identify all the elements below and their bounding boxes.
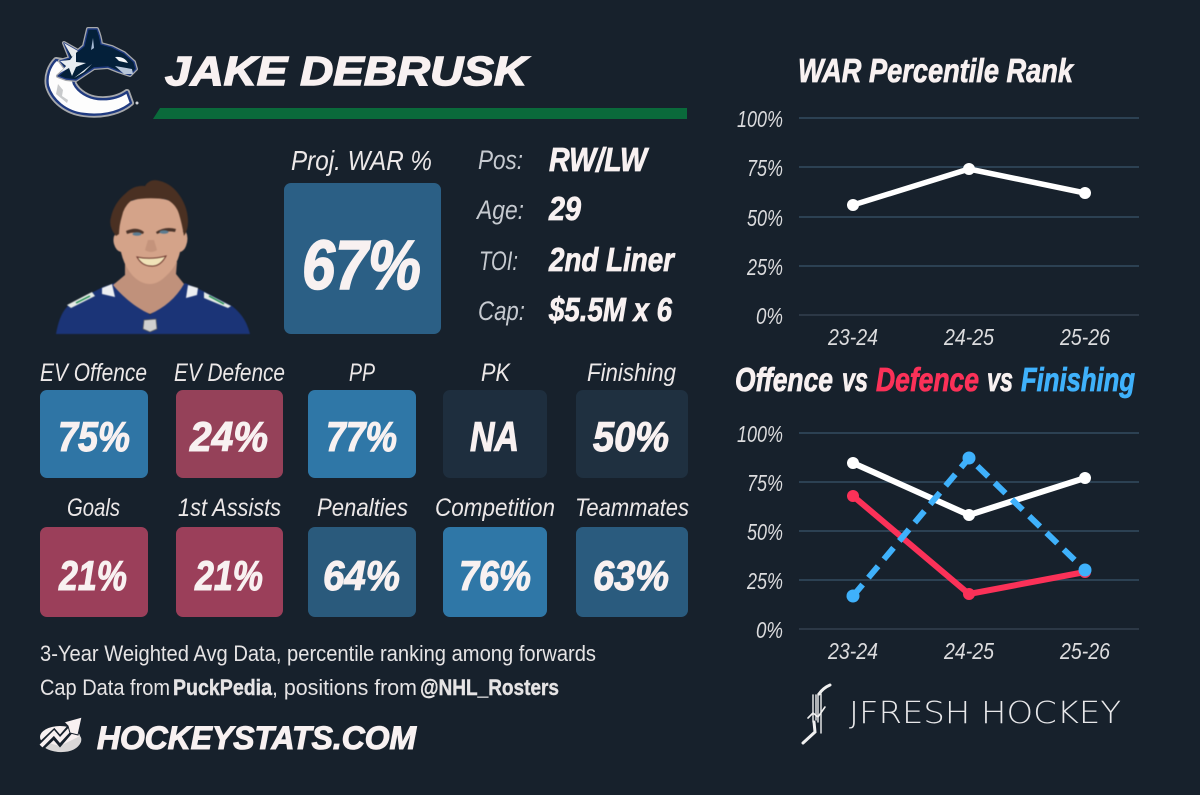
chart: offence, defence and finishing line chart: 75%: [747, 470, 783, 496]
jersey: [56, 283, 250, 334]
face: [113, 198, 188, 284]
player photo: [56, 180, 250, 334]
text block: data notes: @NHL_Rosters: [420, 675, 559, 700]
stat: Goals: [40, 494, 148, 617]
wordmark: JFRESH HOCKEY: JFRESH HOCKEY: [849, 696, 1121, 731]
stat: Finishing: [576, 359, 688, 478]
gray outline of orca: [58, 29, 136, 80]
stat: PP: 77%: [326, 413, 397, 460]
panel: player info: 2nd Liner: [548, 241, 676, 278]
panel: player info: TOI:: [479, 246, 518, 276]
label: Proj. WAR %: Proj. WAR %: [291, 145, 432, 176]
chart: offence, defence and finishing line chart: 25%: [746, 568, 783, 594]
stat: PK: NA: [470, 413, 519, 460]
stat: 1st Assists: [176, 494, 283, 617]
stat: EV Defence: 24%: [189, 413, 268, 460]
text block: data notes: Cap Data from: [40, 675, 170, 700]
nose: [145, 240, 157, 252]
heading: Offence vs Defence vs Finishing: Defence: [876, 361, 979, 398]
panel: stat row one: [40, 359, 688, 478]
icon: HockeyStats puck and arrow: [38, 717, 82, 752]
stat: Penalties: 64%: [323, 552, 400, 599]
stat: PK: [443, 359, 547, 478]
chart: offence, defence and finishing line chart: 23-24: [827, 638, 878, 664]
orca markings: [64, 43, 78, 57]
chart: WAR percentile rank line chart: [737, 106, 1139, 350]
panel: player info: Pos:: [478, 145, 523, 175]
heading: Offence vs Defence vs Finishing: Offence: [735, 361, 833, 398]
icon: Canucks team logo: [47, 29, 139, 115]
chart: offence, defence and finishing line chart: 50%: [747, 519, 783, 545]
text block: data notes: [40, 641, 596, 700]
chart: WAR percentile rank line chart: 75%: [747, 155, 783, 181]
stat: EV Offence: EV Offence: [40, 359, 147, 387]
stat: PP: [308, 359, 416, 478]
stat: Goals: Goals: [67, 494, 120, 522]
chart: WAR percentile rank line chart: 0%: [756, 303, 783, 329]
stat: PK: PK: [481, 359, 511, 387]
text block: data notes: PuckPedia: [173, 675, 273, 700]
chart: WAR percentile rank line chart: 23-24: [827, 324, 878, 350]
panel: player info: RW/LW: [549, 141, 649, 178]
chart: WAR percentile rank line chart: 100%: [737, 106, 783, 132]
stat: Penalties: Penalties: [317, 494, 408, 522]
panel: player info: [475, 141, 676, 328]
gray outline of C: [47, 60, 131, 115]
icon: JFresh hockey sticks: [803, 685, 830, 743]
stat: Penalties: [308, 494, 416, 617]
panel: player info: $5.5M x 6: [548, 291, 673, 328]
stat: EV Offence: 75%: [58, 413, 130, 460]
stat: 1st Assists: 21%: [194, 552, 263, 599]
stat: Teammates: 63%: [593, 552, 669, 599]
stat: EV Offence: [40, 359, 148, 478]
heading: Offence vs Defence vs Finishing: vs: [987, 361, 1013, 398]
eyes: [132, 232, 142, 236]
stat: PP: PP: [349, 359, 375, 387]
eyebrows: [126, 229, 144, 234]
green title bar: [153, 108, 687, 119]
white C: [47, 60, 131, 115]
text block: data notes: 3-Year Weighted Avg Data, percentile ranking among forwards: [40, 641, 596, 666]
chart: offence, defence and finishing line chart: [737, 421, 1139, 664]
chart: offence, defence and finishing line chart: 24-25: [943, 638, 994, 664]
text block: data notes: , positions from: [272, 675, 417, 700]
chart: offence, defence and finishing line chart: 25-26: [1059, 638, 1110, 664]
shoulder patches: [67, 292, 95, 308]
chart: offence, defence and finishing line chart: 0%: [756, 617, 783, 643]
panel: projected WAR box: 67%: [302, 226, 421, 304]
panel: player info: Cap:: [478, 296, 525, 326]
chart: WAR percentile rank line chart: 24-25: [943, 324, 994, 350]
collar stripes: [102, 284, 115, 297]
panel: player info: 29: [548, 190, 582, 227]
panel: projected WAR box: [284, 183, 441, 334]
chart: WAR percentile rank line chart: 25%: [746, 254, 783, 280]
smile: [137, 256, 166, 266]
wordmark: HOCKEYSTATS.COM: HOCKEYSTATS.COM: [97, 720, 417, 756]
stat: EV Defence: EV Defence: [174, 359, 285, 387]
C shading: [56, 84, 68, 103]
stat: Finishing: Finishing: [587, 359, 676, 387]
neck: [113, 262, 184, 314]
stat: EV Defence: [174, 359, 285, 478]
stat: Finishing: 50%: [593, 413, 669, 460]
stat: Teammates: Teammates: [575, 494, 689, 522]
stat: Competition: Competition: [435, 494, 555, 522]
chart: WAR percentile rank line chart: 50%: [747, 205, 783, 231]
title: JAKE DEBRUSK: [165, 48, 531, 94]
heading: WAR Percentile Rank: WAR Percentile Rank: [798, 52, 1074, 89]
panel: player info: Age:: [475, 195, 524, 225]
stat: Teammates: [575, 494, 689, 617]
chart: WAR percentile rank line chart: 25-26: [1059, 324, 1110, 350]
heading: Offence vs Defence vs Finishing: [735, 361, 1135, 398]
stat: 1st Assists: 1st Assists: [178, 494, 281, 522]
orca body: [58, 29, 136, 80]
hair: [110, 180, 188, 236]
stat: Goals: 21%: [58, 552, 127, 599]
heading: Offence vs Defence vs Finishing: vs: [842, 361, 868, 398]
chart: offence, defence and finishing line chart: 100%: [737, 421, 783, 447]
heading: Offence vs Defence vs Finishing: Finishing: [1021, 361, 1135, 398]
stat: Competition: 76%: [459, 552, 531, 599]
NHL shield: [143, 319, 157, 332]
panel: stat row two: [40, 494, 689, 617]
stat: Competition: [435, 494, 555, 617]
